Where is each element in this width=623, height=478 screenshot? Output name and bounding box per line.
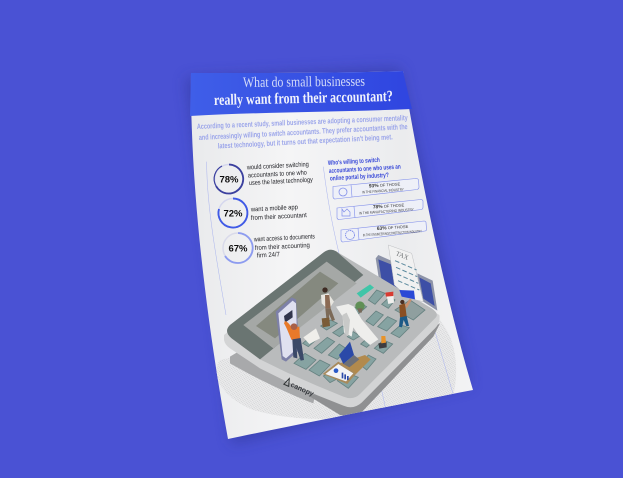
- intro paragraph: According to a recent study, small businesses are adopting a consumer mentality: [197, 113, 408, 131]
- calculator brand logo: canopy: [289, 382, 315, 398]
- right panel heading: [328, 157, 401, 182]
- calculator brand logo: [283, 378, 315, 398]
- stat: 72%: from their accountant: [251, 212, 307, 222]
- row: financial industry: 93% OF THOSE: [369, 181, 401, 189]
- dotted ground pattern: [216, 318, 456, 419]
- row: manufacturing industry: 78% OF THOSE: [373, 202, 405, 210]
- stat: 72%: want a mobile app: [250, 204, 298, 214]
- stat: 78%: accountants to one who: [248, 169, 307, 179]
- display screen: [256, 272, 338, 338]
- right panel heading: online portal by industry?: [330, 172, 389, 182]
- teal key: [357, 284, 374, 298]
- guide lines: [207, 162, 453, 420]
- keys: [294, 290, 425, 388]
- laptop behind the tax sheet: [376, 255, 437, 311]
- row: manufacturing industry: [337, 200, 423, 220]
- stat: 72%: [218, 198, 307, 228]
- paper shadow: [186, 68, 470, 444]
- title: [214, 74, 393, 109]
- display housing: [227, 250, 363, 359]
- stat: 67%: 67%: [228, 244, 248, 254]
- stat: 78%: 78%: [219, 174, 239, 186]
- stat: 72%: 72%: [223, 208, 243, 220]
- calculator rim: [224, 314, 440, 408]
- laptop on desk: [339, 342, 370, 378]
- man standing with vest: [321, 287, 335, 327]
- paper receipt ribbon: [336, 304, 378, 345]
- stat: 67%: from their accounting: [255, 242, 310, 252]
- row: engineering industry: IN THE ENGINEERING/CONSTRUCTION INDUSTRY: [363, 229, 422, 237]
- documents chart tray: [323, 362, 356, 384]
- display bezel: [243, 262, 357, 348]
- illustration: calculator: [207, 162, 456, 420]
- clipboard icon: [303, 328, 320, 344]
- calculator shadow: [230, 352, 317, 403]
- tax sheet: [388, 245, 423, 302]
- intro paragraph: latest technology, but it turns out that expectation isn't being met.: [218, 132, 393, 150]
- stat: 67%: want access to documents: [253, 233, 316, 244]
- stat: 78%: [214, 161, 314, 194]
- row: financial industry: [333, 178, 419, 199]
- blue stamp on sheet: [399, 290, 415, 299]
- paper sheet: [191, 71, 473, 439]
- stat: 78%: would consider switching: [246, 161, 309, 172]
- red calendar: [386, 293, 394, 304]
- intro paragraph: [197, 113, 408, 150]
- right panel heading: accountants to one who uses an: [329, 164, 401, 175]
- row: financial industry: IN THE FINANCIAL INDUSTRY: [362, 188, 404, 194]
- header band: [190, 71, 412, 116]
- stat: 67%: [223, 233, 316, 263]
- infographic mockup scene: [182, 64, 473, 446]
- man with raised arms: [399, 299, 412, 327]
- orange figure on key: [378, 342, 387, 349]
- phone with woman: [276, 297, 304, 362]
- tax sheet: TAX: [395, 250, 410, 262]
- calculator top face: [227, 250, 437, 398]
- row: engineering industry: [341, 221, 426, 242]
- intro paragraph: and increasingly willing to switch accountants. They prefer accountants with the: [199, 122, 408, 142]
- stat: 67%: firm 24/7: [257, 251, 280, 259]
- calculator lower body: [310, 323, 440, 416]
- title: What do small businesses: [243, 74, 365, 91]
- plant: [355, 301, 365, 313]
- right panel heading: Who's willing to switch: [328, 157, 380, 167]
- title: really want from their accountant?: [214, 88, 393, 109]
- right panel: online portal by industry: [328, 157, 426, 242]
- row: engineering industry: 63% OF THOSE: [377, 224, 409, 232]
- row: manufacturing industry: IN THE MANUFACTURING INDUSTRY: [359, 208, 414, 215]
- stat: 78%: uses the latest technology: [249, 177, 314, 187]
